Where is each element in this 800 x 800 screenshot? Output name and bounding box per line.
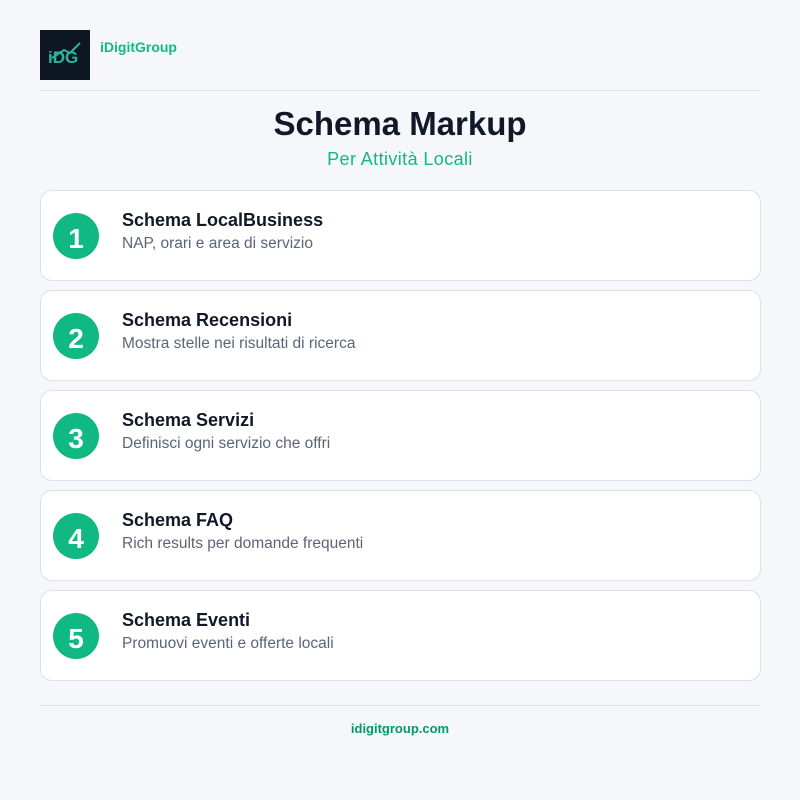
card 2: Schema Recensioni [122, 310, 292, 330]
card 4: 4 [68, 523, 84, 554]
card 4: Schema FAQ [122, 510, 233, 530]
card 1: Schema LocalBusiness [122, 210, 323, 230]
card 4 [40, 490, 761, 581]
card 3: Schema Servizi [122, 410, 254, 430]
title: Schema Markup [273, 105, 527, 142]
card 1: 1 [68, 223, 84, 254]
card 2: 2 [68, 323, 84, 354]
card 2: Mostra stelle nei risultati di ricerca [122, 335, 355, 352]
card 5: 5 [68, 623, 84, 654]
footer: idigitgroup.com [351, 721, 449, 736]
card 3: Definisci ogni servizio che offri [122, 435, 330, 452]
card 3 [40, 390, 761, 481]
card 1 [40, 190, 761, 281]
card 5: Schema Eventi [122, 610, 250, 630]
card 2 [40, 290, 761, 381]
logo [40, 30, 90, 80]
card 5: Promuovi eventi e offerte locali [122, 635, 334, 652]
card 4: Rich results per domande frequenti [122, 535, 363, 552]
subtitle: Per Attività Locali [327, 149, 473, 169]
brand name: iDigitGroup [100, 39, 177, 55]
card 5 [40, 590, 761, 681]
card 3: 3 [68, 423, 84, 454]
card 1: NAP, orari e area di servizio [122, 235, 313, 252]
logo: iDG [48, 48, 78, 67]
